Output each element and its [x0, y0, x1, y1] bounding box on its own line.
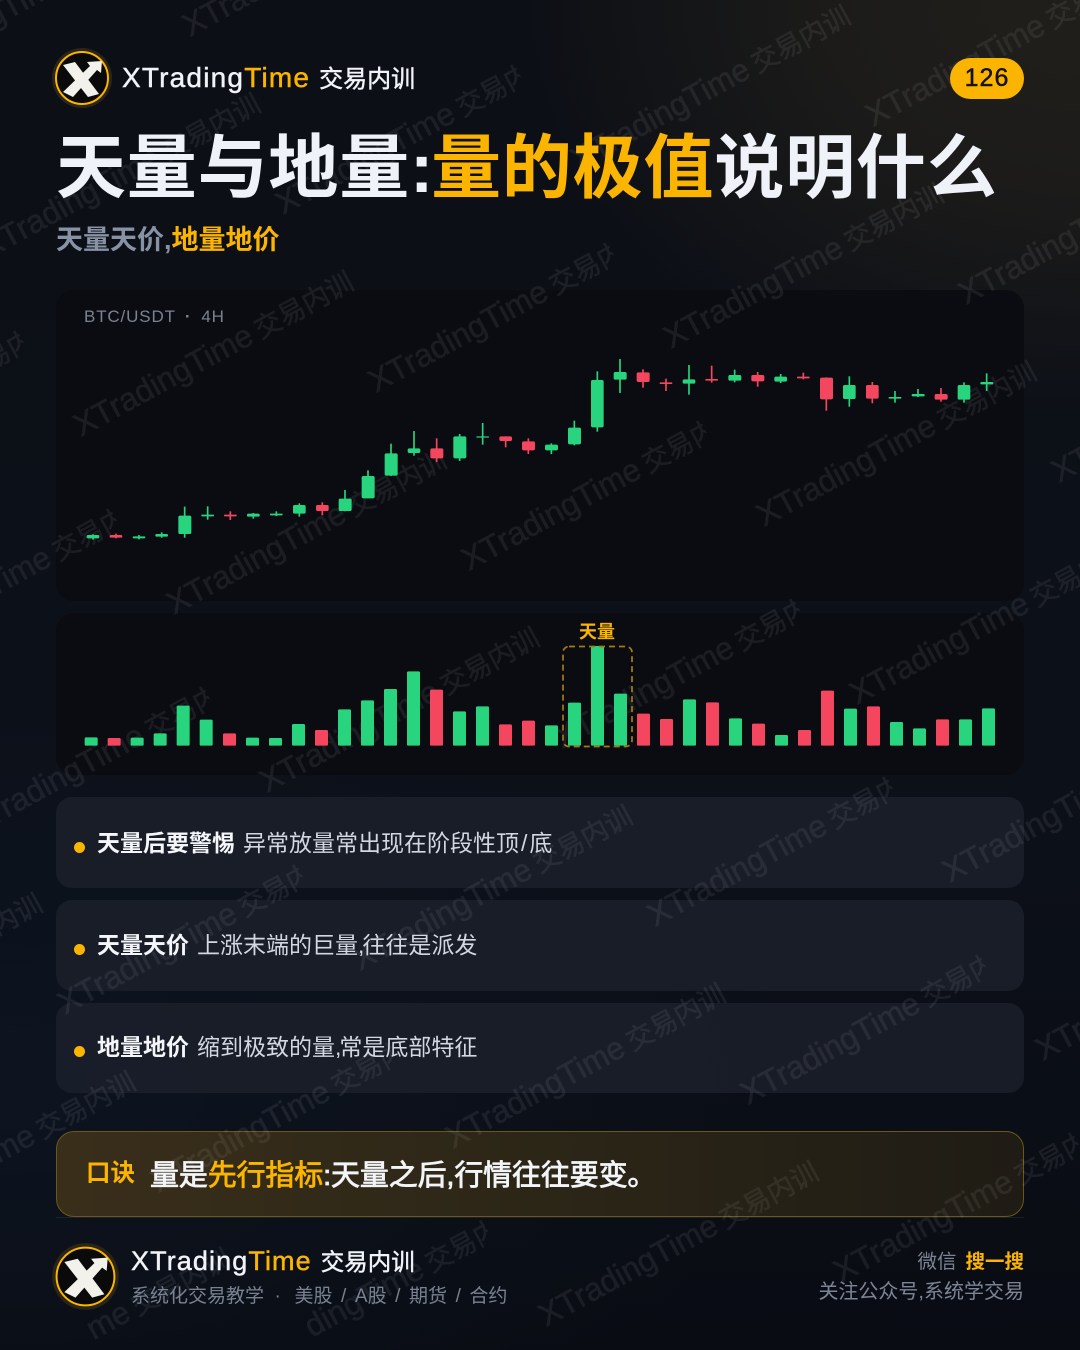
watermark pattern: XTradingTime 交易内训: [269, 40, 561, 221]
footer wechat search: 微信 搜一搜: [917, 1251, 1024, 1273]
point 1 text: 天量后要警惕 异常放量常出现在阶段性顶/底: [97, 830, 552, 856]
issue number badge: [950, 58, 1024, 99]
header brand name: XTradingTime 交易内训: [122, 62, 415, 93]
watermark pattern: XTradingTime 交易内训: [144, 1018, 436, 1199]
icon: header logo: [52, 48, 112, 108]
watermark pattern: XTradingTime 交易内训: [532, 1152, 824, 1333]
title: 天量与地量:量的极值说明什么: [56, 129, 998, 207]
bullet 2: [74, 944, 85, 955]
watermark pattern: XTradingTime 交易内训: [455, 396, 747, 577]
watermark pattern: XTradingTime 交易内训: [51, 840, 343, 1021]
watermark pattern: XTradingTime 交易内训: [253, 618, 545, 799]
icon: footer logo: [52, 1243, 119, 1310]
watermark pattern: XTradingTime 交易内训: [641, 752, 933, 933]
subtitle: 天量天价,地量地价: [56, 225, 280, 255]
chart label: BTC/USDT · 4H: [84, 307, 225, 326]
panel: mnemonic callout: [56, 1131, 1024, 1217]
watermark pattern: XTradingTime 交易内训: [750, 352, 1042, 533]
watermark pattern: XTradingTime 交易内训: [362, 218, 654, 399]
callout text: 量是先行指标:天量之后,行情往往要变。: [150, 1160, 656, 1192]
watermark pattern: dingTime 交易内训: [298, 1196, 530, 1344]
panel: point 3 background: [56, 1003, 1024, 1093]
footer follow note: 关注公众号,系统学交易: [818, 1281, 1024, 1303]
watermark pattern: XTradingTime 交易内训: [548, 574, 840, 755]
volume spike highlight box: [562, 646, 633, 748]
watermark pattern: me 交易内训: [80, 1239, 236, 1346]
watermark pattern: XTradingTime 交易内训: [346, 796, 638, 977]
watermark pattern: XTradingTime 交易内训: [439, 974, 731, 1155]
panel: point 1 background: [56, 797, 1024, 888]
footer divider: [56, 1217, 1024, 1218]
point 2 text: 天量天价 上涨末端的巨量,往往是派发: [97, 932, 477, 958]
footer brand name: XTradingTime 交易内训: [131, 1246, 415, 1276]
panel: volume chart background: [56, 613, 1024, 775]
panel: point 2 background: [56, 900, 1024, 991]
watermark pattern: XTradingTime 交易内训: [160, 440, 452, 621]
watermark pattern: XTradingTime 交易内训: [657, 174, 949, 355]
panel: candlestick chart background: [56, 290, 1024, 601]
issue number badge: 126: [965, 64, 1009, 92]
watermark pattern: XTradingTime 交易内训: [67, 262, 359, 443]
point 3 text: 地量地价 缩到极致的量,常是底部特征: [97, 1034, 477, 1060]
watermark pattern: XTradingTime 交易内训: [564, 0, 856, 177]
footer tagline: 系统化交易教学 · 美股 / A股 / 期货 / 合约: [131, 1286, 507, 1307]
callout label: 口诀: [86, 1160, 135, 1187]
volume spike label: 天量: [579, 622, 615, 642]
watermark pattern: XTradingTime 交易内训: [734, 930, 1026, 1111]
bullet 3: [74, 1046, 85, 1057]
bullet 1: [74, 842, 85, 853]
